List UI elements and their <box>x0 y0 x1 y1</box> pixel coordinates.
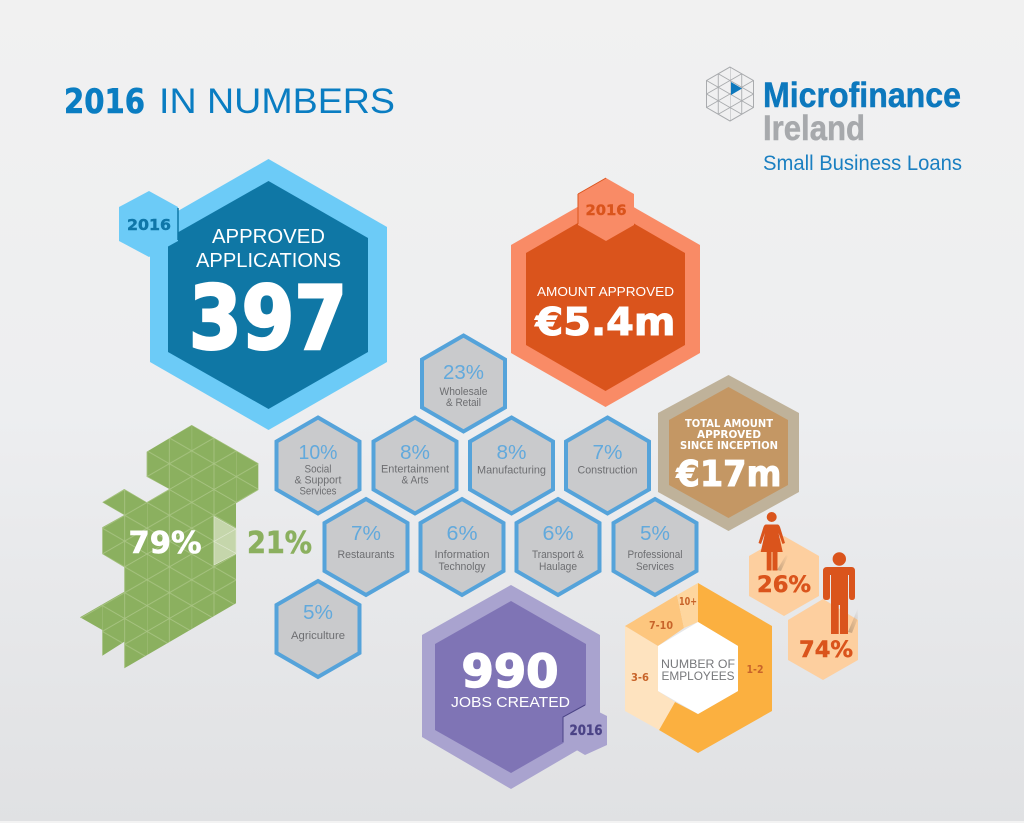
heading: approved applications <box>196 226 341 272</box>
sector: wholesale and retail: Wholesale <box>440 386 488 398</box>
icon: woman <box>758 512 785 570</box>
value: 26 percent: 26% <box>757 573 811 598</box>
icon: lattice hexagon cube <box>706 67 754 121</box>
sector: manufacturing <box>470 418 553 514</box>
title: IN NUMBERS <box>159 82 395 121</box>
centre: number of employees: EMPLOYEES <box>662 669 734 683</box>
badge: 2016: 2016 <box>127 216 171 234</box>
sector: entertainment and arts: Entertainment <box>381 464 449 476</box>
number: 397: 397 <box>189 268 347 370</box>
number: 990: 990 <box>462 645 558 698</box>
sector: construction <box>566 418 649 514</box>
badge: 2016: 2016 <box>570 723 602 739</box>
segment labels: 1-2 <box>746 664 764 676</box>
sector: agriculture: 5% <box>303 602 333 624</box>
sector: entertainment and arts: & Arts <box>402 474 429 486</box>
panel: male 74 percent <box>788 552 858 680</box>
value: 74 percent: 74% <box>799 638 853 663</box>
segment: 1-2 employees <box>659 583 772 753</box>
chart: number of employees hexagon <box>625 583 772 753</box>
sector: transport and haulage: 6% <box>543 523 574 545</box>
sector: social and support services <box>276 418 360 514</box>
segment: 7-10 employees <box>625 595 684 646</box>
sector: wholesale and retail: 23% <box>443 362 484 384</box>
sector: social and support services: & Support <box>294 474 342 486</box>
number: 17m euro: €17m <box>676 454 782 495</box>
sector: transport and haulage: Haulage <box>539 561 577 573</box>
panel: female 26 percent <box>749 512 819 616</box>
label: amount approved: AMOUNT APPROVED <box>537 284 674 299</box>
sector: agriculture: Agriculture <box>291 630 345 642</box>
badge: 2016: 2016 <box>586 203 626 219</box>
logo wordmark: Small Business Loans <box>763 152 962 175</box>
sector: restaurants: Restaurants <box>338 549 395 561</box>
segment: 10+ employees <box>677 583 698 628</box>
sector: restaurants: 7% <box>351 523 381 545</box>
panel: jobs created <box>422 585 607 789</box>
sector: construction: 7% <box>592 442 623 464</box>
sector: professional services: 5% <box>640 523 670 545</box>
icon: man <box>823 552 855 634</box>
segment labels: 7-10 <box>649 620 673 632</box>
logo wordmark <box>763 76 962 175</box>
sector: information technology: Technolgy <box>438 561 486 573</box>
label: total amount approved since inception <box>680 418 778 452</box>
sector: entertainment and arts <box>374 418 456 514</box>
sector: transport and haulage <box>516 499 600 595</box>
logo: Microfinance Ireland <box>706 67 962 175</box>
badge: 2016 <box>578 178 634 241</box>
panel: amount approved <box>511 178 700 407</box>
number: 5.4m euro: €5.4m <box>534 300 676 344</box>
badge: 2016 <box>119 191 178 257</box>
title: 2016 <box>64 82 145 122</box>
panel: total amount since inception <box>658 375 799 531</box>
heading: approved applications: APPROVED <box>212 226 325 248</box>
sector: wholesale and retail: & Retail <box>446 397 481 409</box>
label: total amount approved since inception: TOTAL AMOUNT <box>685 418 774 430</box>
centre: number of employees: NUMBER OF <box>661 657 735 671</box>
sector: professional services: Professional <box>628 549 682 561</box>
sector: construction: Construction <box>578 464 638 476</box>
logo wordmark: Ireland <box>763 109 865 148</box>
title <box>64 82 395 122</box>
segment labels: 3-6 <box>631 672 649 684</box>
value: 21 percent: 21% <box>247 526 312 561</box>
sector: professional services: Services <box>636 561 674 573</box>
centre: number of employees <box>658 622 738 714</box>
value: 79 percent: 79% <box>128 526 202 561</box>
highlighted triangles: 21 percent <box>214 516 236 565</box>
sector: transport and haulage: Transport & <box>532 549 585 561</box>
sector: information technology: Information <box>434 549 490 561</box>
label: jobs created: JOBS CREATED <box>451 695 570 711</box>
segment: 3-6 employees <box>625 626 675 730</box>
sector: social and support services: 10% <box>298 442 338 464</box>
segment labels: 10+ <box>679 596 697 608</box>
sector: manufacturing: 8% <box>496 442 527 464</box>
heading: approved applications: APPLICATIONS <box>196 250 341 272</box>
sector: information technology: 6% <box>447 523 478 545</box>
sector: information technology <box>420 499 504 595</box>
badge: 2016 <box>563 705 607 755</box>
sector: restaurants <box>324 499 408 595</box>
logo wordmark: Microfinance <box>763 76 961 115</box>
sector: agriculture <box>276 581 360 677</box>
label: total amount approved since inception: SINCE INCEPTION <box>680 440 778 452</box>
sector: social and support services: Social <box>304 464 332 476</box>
sector: entertainment and arts: 8% <box>400 442 430 464</box>
sector: wholesale and retail <box>422 336 505 432</box>
segment labels <box>631 596 764 684</box>
label: total amount approved since inception: APPROVED <box>697 429 761 441</box>
map shape with triangular lattice <box>80 425 258 668</box>
panel: approved applications <box>119 159 387 430</box>
map: Ireland urban rural split <box>80 425 312 668</box>
sector: manufacturing: Manufacturing <box>477 464 546 476</box>
sector: professional services <box>614 499 696 595</box>
sector: social and support services: Services <box>300 486 337 498</box>
